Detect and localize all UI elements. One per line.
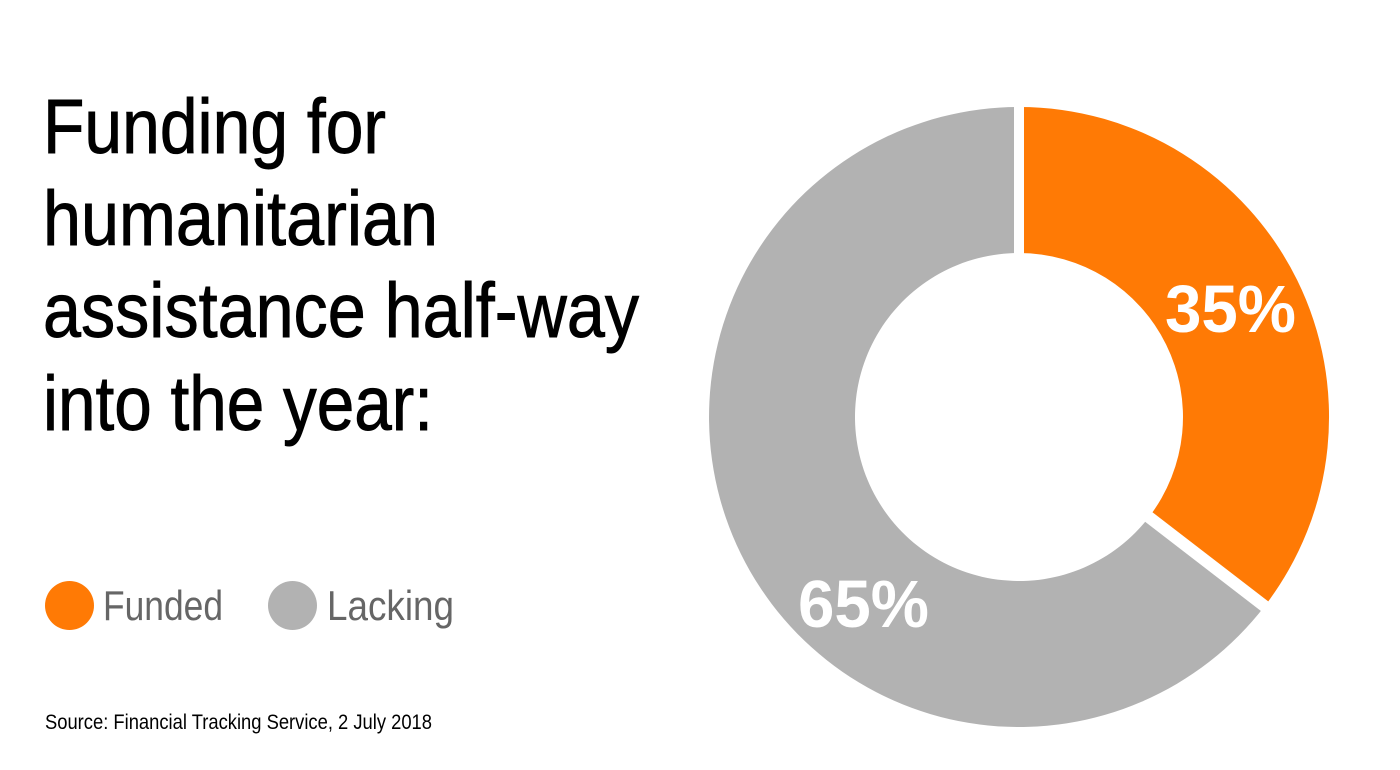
source note: Source: Financial Tracking Service, 2 July 2018 <box>45 711 432 734</box>
segment: funded 35% <box>1019 107 1329 606</box>
legend item: funded <box>45 581 223 630</box>
value label: 35%: 35% <box>1165 272 1296 347</box>
title: humanitarian <box>43 176 438 262</box>
donut chart <box>709 100 1329 727</box>
legend item: lacking <box>268 581 454 630</box>
legend item: lacking: Lacking <box>327 582 454 629</box>
legend item: funded: Funded <box>103 582 223 629</box>
title <box>43 84 639 447</box>
segment gap: top <box>1014 100 1024 258</box>
title: assistance half-way <box>43 268 639 354</box>
segment: lacking 65% <box>709 107 1265 727</box>
title: Funding for <box>43 84 386 170</box>
title: into the year: <box>43 361 433 447</box>
value label: 65%: 65% <box>798 567 929 642</box>
legend <box>45 581 454 630</box>
segment gap: lower right <box>1142 512 1272 612</box>
